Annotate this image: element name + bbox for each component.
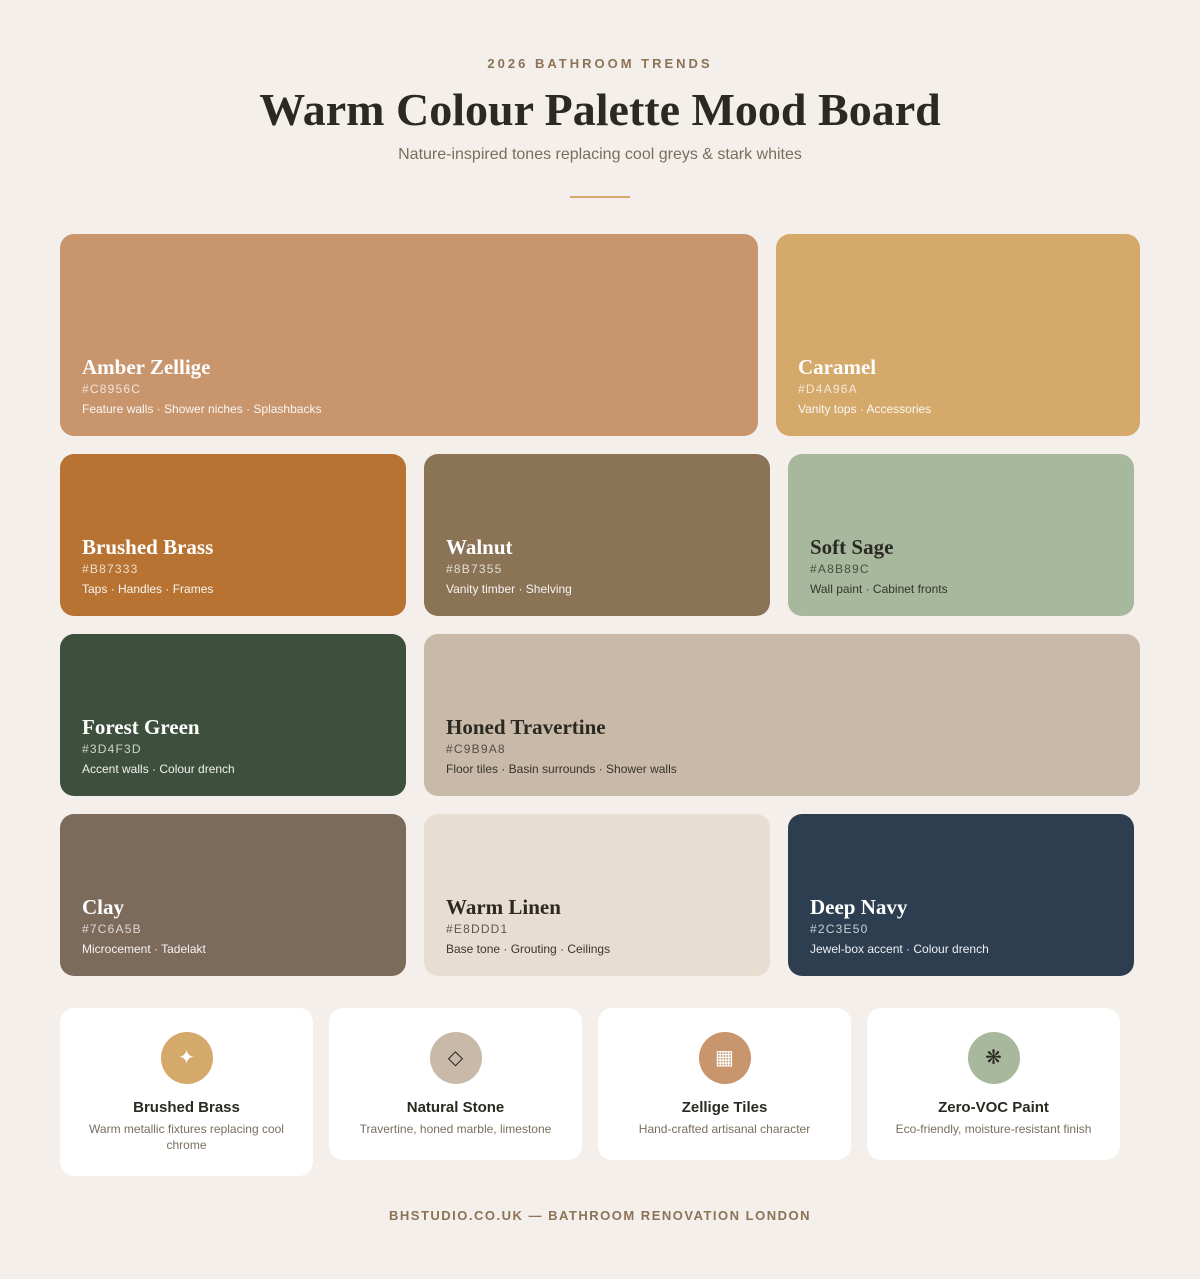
material card: Zero-VOC Paint: ❋ xyxy=(985,1047,1002,1069)
material card: Brushed Brass: Brushed Brass xyxy=(133,1099,240,1116)
swatch: Warm Linen: #E8DDD1 xyxy=(446,922,508,936)
swatch: Honed Travertine: Floor tiles · Basin surrounds · Shower walls xyxy=(446,762,677,776)
swatch: Caramel: Caramel xyxy=(798,355,876,379)
material card: Natural Stone: Natural Stone xyxy=(407,1099,504,1116)
swatch: Clay: Microcement · Tadelakt xyxy=(82,942,206,956)
swatch: Clay xyxy=(60,814,406,976)
material card: Zero-VOC Paint xyxy=(867,1008,1120,1160)
eyebrow: 2026 BATHROOM TRENDS xyxy=(487,56,713,71)
material card: Zellige Tiles: Hand-crafted artisanal character xyxy=(639,1122,810,1136)
material card: Natural Stone xyxy=(329,1008,582,1160)
title: Warm Colour Palette Mood Board xyxy=(259,84,941,135)
swatch: Amber Zellige xyxy=(60,234,758,436)
swatch: Warm Linen: Base tone · Grouting · Ceilings xyxy=(446,942,610,956)
material card: Brushed Brass: Warm metallic fixtures replacing cool chrome xyxy=(89,1122,284,1152)
material card: Natural Stone: Travertine, honed marble, limestone xyxy=(360,1122,551,1136)
swatch: Caramel xyxy=(776,234,1140,436)
material card: Zero-VOC Paint: Zero-VOC Paint xyxy=(938,1099,1049,1116)
material card: Brushed Brass xyxy=(60,1008,313,1176)
swatch: Forest Green: Accent walls · Colour drench xyxy=(82,762,235,776)
swatch: Deep Navy: #2C3E50 xyxy=(810,922,868,936)
swatch: Brushed Brass: Brushed Brass xyxy=(82,535,213,559)
swatch: Deep Navy: Jewel-box accent · Colour drench xyxy=(810,942,989,956)
swatch: Caramel: #D4A96A xyxy=(798,382,858,396)
swatch: Warm Linen xyxy=(424,814,770,976)
swatch: Soft Sage xyxy=(788,454,1134,616)
material card: Zellige Tiles: ▦ xyxy=(715,1047,734,1069)
swatch: Soft Sage: Soft Sage xyxy=(810,535,893,559)
swatch: Clay: #7C6A5B xyxy=(82,922,142,936)
material card: Zellige Tiles: Zellige Tiles xyxy=(682,1099,767,1116)
swatch: Amber Zellige: Feature walls · Shower niches · Splashbacks xyxy=(82,402,321,416)
swatch: Clay: Clay xyxy=(82,895,124,919)
swatch: Forest Green: Forest Green xyxy=(82,715,200,739)
swatch: Deep Navy xyxy=(788,814,1134,976)
swatch: Honed Travertine: Honed Travertine xyxy=(446,715,606,739)
swatch: Forest Green xyxy=(60,634,406,796)
swatch: Walnut: Vanity timber · Shelving xyxy=(446,582,572,596)
swatch: Caramel: Vanity tops · Accessories xyxy=(798,402,931,416)
swatch: Brushed Brass: Taps · Handles · Frames xyxy=(82,582,213,596)
swatch: Amber Zellige: #C8956C xyxy=(82,382,141,396)
swatch: Soft Sage: Wall paint · Cabinet fronts xyxy=(810,582,948,596)
swatch: Honed Travertine: #C9B9A8 xyxy=(446,742,506,756)
swatch: Brushed Brass: #B87333 xyxy=(82,562,138,576)
swatch: Warm Linen: Warm Linen xyxy=(446,895,561,919)
swatch: Walnut xyxy=(424,454,770,616)
swatch: Amber Zellige: Amber Zellige xyxy=(82,355,211,379)
material card: Zellige Tiles xyxy=(598,1008,851,1160)
swatch: Soft Sage: #A8B89C xyxy=(810,562,870,576)
swatch: Brushed Brass xyxy=(60,454,406,616)
subtitle: Nature-inspired tones replacing cool greys & stark whites xyxy=(398,146,802,163)
material card: Natural Stone: ◇ xyxy=(448,1047,463,1069)
swatch: Forest Green: #3D4F3D xyxy=(82,742,142,756)
swatch: Walnut: #8B7355 xyxy=(446,562,502,576)
swatch: Honed Travertine xyxy=(424,634,1140,796)
swatch: Deep Navy: Deep Navy xyxy=(810,895,907,919)
swatch: Walnut: Walnut xyxy=(446,535,513,559)
material card: Brushed Brass: ✦ xyxy=(178,1047,195,1069)
footer: BHSTUDIO.CO.UK — BATHROOM RENOVATION LONDON xyxy=(389,1208,811,1223)
material card: Zero-VOC Paint: Eco-friendly, moisture-resistant finish xyxy=(896,1122,1091,1136)
